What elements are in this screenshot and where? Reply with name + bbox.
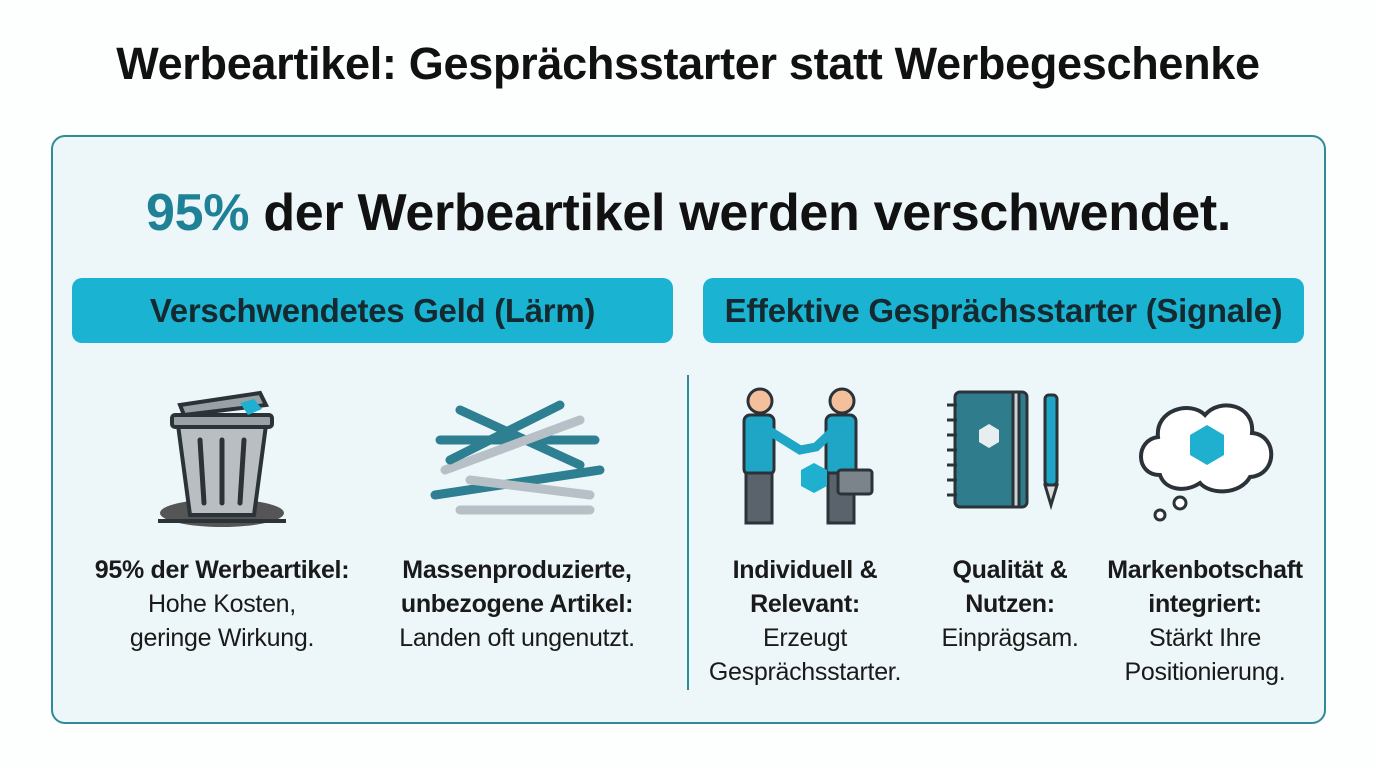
text: col 5: Markenbotschaft bbox=[1107, 556, 1303, 584]
pill: right heading: Effektive Gesprächsstarter (Signale) bbox=[725, 292, 1282, 328]
text: col 5: Stärkt Ihre bbox=[1149, 624, 1261, 652]
icon: notebook and pen bbox=[947, 390, 1059, 510]
text: col 4: Nutzen: bbox=[965, 590, 1055, 618]
icon: trash can bbox=[158, 390, 286, 527]
headline: 95% der Werbeartikel werden verschwendet. bbox=[146, 184, 1231, 242]
text: col 1 bbox=[95, 556, 349, 652]
pill: left heading bbox=[72, 278, 673, 343]
pill: right heading bbox=[703, 278, 1304, 343]
text: col 2: Landen oft ungenutzt. bbox=[399, 624, 635, 652]
pill: left heading: Verschwendetes Geld (Lärm) bbox=[150, 292, 595, 328]
text: col 2: Massenproduzierte, bbox=[402, 556, 632, 584]
title: Werbeartikel: Gesprächsstarter statt Werbegeschenke bbox=[116, 38, 1260, 89]
text: col 3: Individuell & bbox=[733, 556, 877, 584]
text: col 2 bbox=[399, 556, 635, 652]
text: col 3: Erzeugt bbox=[763, 624, 847, 652]
text: col 5: integriert: bbox=[1148, 590, 1262, 618]
icon: pile of pens bbox=[430, 400, 604, 514]
text: col 5: Positionierung. bbox=[1125, 658, 1285, 686]
text: col 3: Relevant: bbox=[750, 590, 860, 618]
panel: main bbox=[51, 135, 1326, 724]
icon: thought cloud bbox=[1139, 403, 1274, 522]
text: col 3: Gesprächsstarter. bbox=[709, 658, 901, 686]
text: col 1: Hohe Kosten, bbox=[148, 590, 296, 618]
text: col 3 bbox=[709, 556, 901, 686]
text: col 1: geringe Wirkung. bbox=[130, 624, 314, 652]
text: col 1: 95% der Werbeartikel: bbox=[95, 556, 349, 584]
text: col 4: Qualität & bbox=[952, 556, 1068, 584]
text: col 4: Einprägsam. bbox=[941, 624, 1079, 652]
text: col 4 bbox=[941, 556, 1079, 652]
text: col 5 bbox=[1107, 556, 1303, 686]
icon: handshake bbox=[742, 388, 874, 524]
text: col 2: unbezogene Artikel: bbox=[401, 590, 633, 618]
